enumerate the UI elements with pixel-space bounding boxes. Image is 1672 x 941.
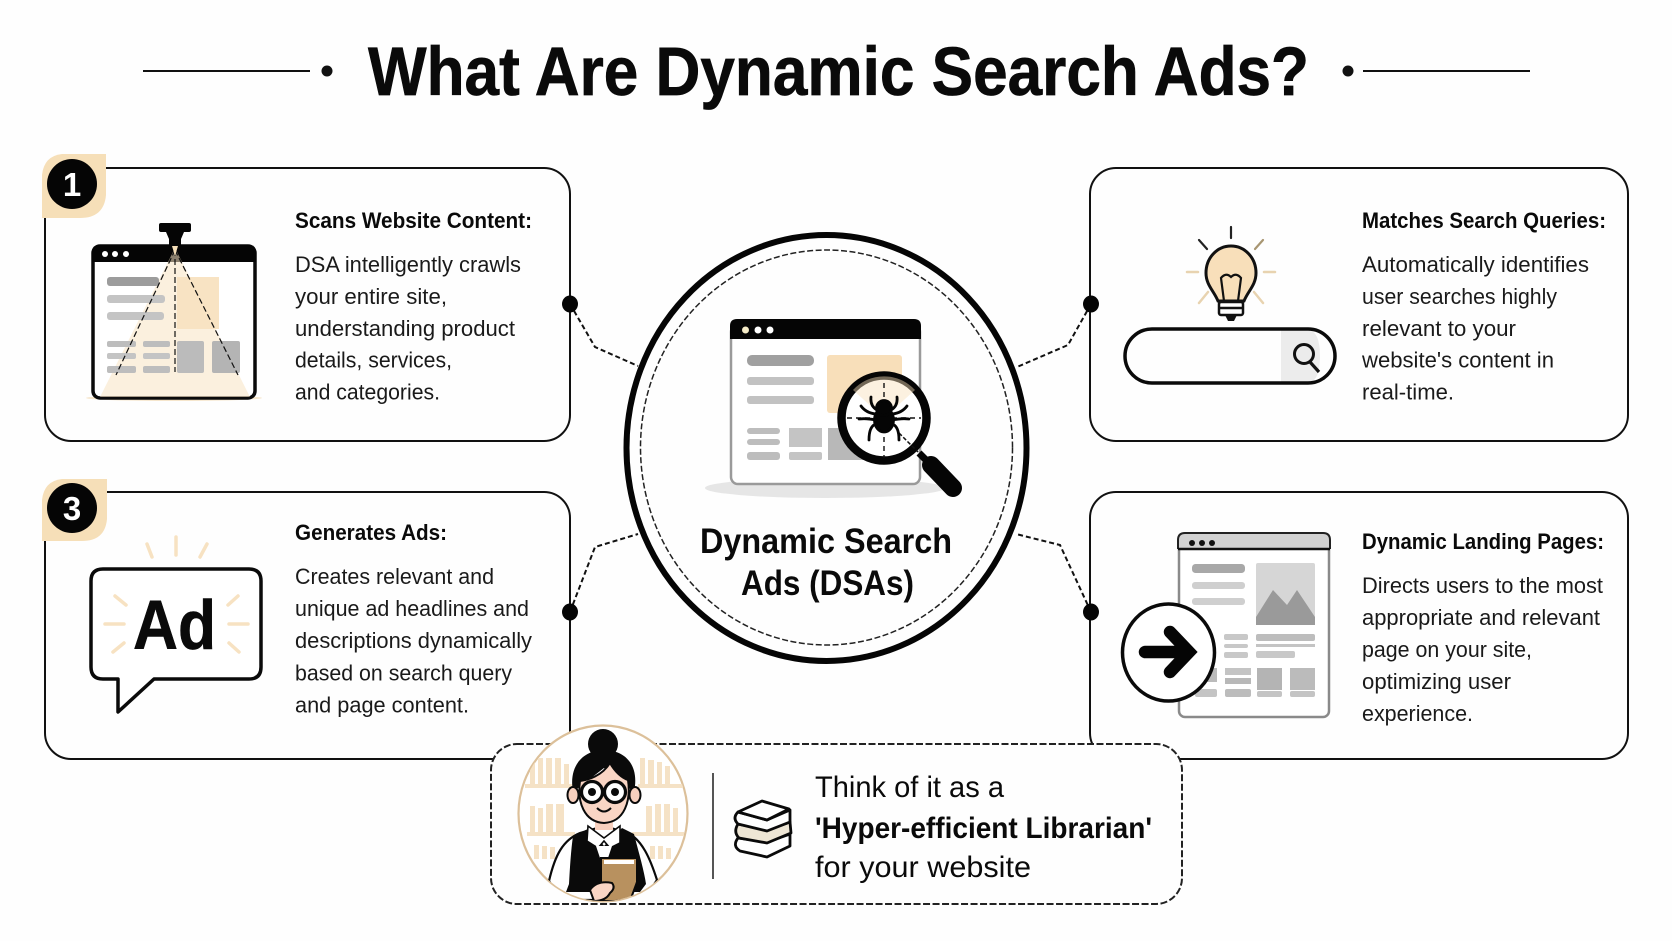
heading: Matches Search Queries: [1362,208,1606,233]
body text: experience. [1362,701,1473,726]
title: What Are Dynamic Search Ads? [368,33,1309,110]
connector dot [1083,296,1099,312]
connector dot [562,296,578,312]
body text: optimizing user [1362,669,1511,694]
body text: descriptions dynamically [295,628,532,653]
body text: DSA intelligently crawls [295,252,521,277]
body text: page on your site, [1362,637,1532,662]
center label: Ads (DSAs) [741,564,914,603]
figure [549,826,657,900]
body text: and categories. [295,380,440,404]
body text: appropriate and relevant [1362,605,1600,630]
body text: your entire site, [295,284,447,309]
body text [1362,573,1603,726]
icon: light bulb [1187,227,1275,321]
center label: Dynamic Search [700,522,952,561]
heading: Dynamic Landing Pages: [1362,529,1604,554]
heading: Scans Website Content: [295,208,532,233]
icon: browser under scanner [86,223,262,401]
icon: ad speech bubble [91,537,261,712]
badge 1 [42,154,106,218]
panel: generates ads [42,479,578,759]
panel: dynamic landing pages [1083,492,1628,759]
panel: matches search queries [1083,168,1628,441]
book [601,858,637,901]
central circle: dynamic search ads [626,235,1026,661]
analogy text [815,771,1152,884]
spider [859,397,909,440]
body text [295,252,521,404]
body text: based on search query [295,660,512,686]
badge 3: 3 [63,490,81,527]
heading: Generates Ads: [295,520,447,545]
bookshelves [525,757,684,859]
body text: and page content. [295,692,469,718]
body text: website's content in [1361,348,1554,372]
icon: landing page with arrow [1122,533,1330,717]
badge 1: 1 [63,166,81,203]
icon: browser with magnifier and spider [705,319,953,498]
body text: Directs users to the most [1362,573,1603,598]
icon: books [735,801,791,857]
body text: details, services, [295,348,452,372]
analogy text: 'Hyper-efficient Librarian' [815,812,1152,845]
analogy text: for your website [815,851,1031,884]
divider [712,773,714,879]
center label [700,522,952,603]
body text: real-time. [1362,380,1454,404]
analogy text: Think of it as a [815,771,1004,804]
hair and bun [588,729,618,752]
body text: unique ad headlines and [295,596,529,621]
body text [1361,252,1589,404]
body text: user searches highly [1362,284,1557,309]
body text: relevant to your [1362,316,1516,341]
body text: Creates relevant and [295,564,494,589]
body text: Automatically identifies [1362,252,1589,277]
connector dot [562,604,578,620]
icon: ad speech bubble: Ad [133,586,216,664]
badge 3 [42,479,107,541]
body text [295,564,532,718]
librarian avatar [518,726,688,902]
panel: scans website content [42,154,578,441]
analogy callout: librarian [491,726,1182,904]
connector dot [1083,604,1099,620]
connectors [570,304,1091,612]
icon: search bar [1125,329,1335,383]
body text: understanding product [295,316,515,341]
